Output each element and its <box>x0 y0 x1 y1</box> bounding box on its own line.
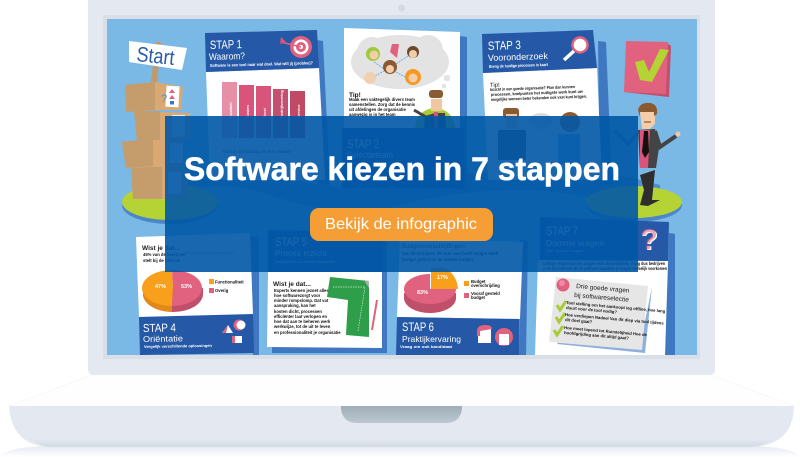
bar chart: Groei <box>263 108 267 118</box>
card: stap 6 <box>396 238 528 355</box>
card: stap 2 tip: STAP 2 <box>347 137 379 151</box>
title: Software kiezen in 7 stappen <box>184 151 620 187</box>
card: stap 2 tip: aanwezig is in het team <box>349 112 396 117</box>
boxes stack <box>122 82 190 199</box>
card: stap 5: hoe softwarezorgt voor <box>274 293 321 298</box>
button <box>310 208 493 241</box>
boxes stack: ? <box>161 93 167 105</box>
card: stap 5: en professionaliteit je organisatie <box>274 330 341 335</box>
sticky note: Drie goede vragen <box>576 283 630 295</box>
left platform <box>122 184 218 224</box>
card: stap 3: Vooronderzoek <box>488 51 549 63</box>
card: stap 7: in de functies van Bij de software waardoor je vragen werkelijk voorkomen <box>543 266 667 271</box>
target icon <box>280 36 312 58</box>
green number seven <box>327 277 369 337</box>
card: stap 2 tip: Maak een vaktegelijk divers team <box>349 97 415 102</box>
sticky note: Tool stelling om het aankoopt ieg offline, hoe lang <box>566 300 666 314</box>
card: stap 4: stelt bij de selectie <box>143 258 181 263</box>
pie chart: 17% <box>437 275 448 281</box>
card: stap 2 tip: uit afdelingen de organisatie <box>349 107 406 112</box>
bar chart: Kwaliteit <box>229 102 233 118</box>
tip man <box>414 90 446 128</box>
card: stap 4: Oriëntatie <box>143 333 183 344</box>
legend: budget <box>471 295 486 300</box>
card: stap 2 tip: samenstellen. Zorg dat de kennis <box>349 102 416 107</box>
card: stap 7: STAP 7 <box>546 226 578 238</box>
pie chart: 47% <box>155 284 166 290</box>
pie chart <box>404 268 458 313</box>
bar chart: Bedrijfsvoering <box>280 89 284 118</box>
magnifier icon <box>564 38 588 60</box>
card: stap 4: de oriëntatie van belang zijn <box>185 250 235 255</box>
card: stap 1: Waarom? <box>209 51 245 63</box>
card: stap 3: STAP 3 <box>488 38 521 53</box>
screen <box>107 19 697 355</box>
persons <box>498 108 580 164</box>
pie chart <box>142 270 203 312</box>
card: stap 1: STAP 1 <box>210 37 242 52</box>
pie chart: 53% <box>181 284 192 290</box>
card: stap 2 tip: Selectieteam <box>347 150 393 160</box>
card: stap 1 <box>205 30 330 185</box>
legend: Budget <box>471 279 486 284</box>
card: stap 4: 45% van de bedrijven <box>143 252 186 257</box>
card: stap 5: aanspraking, kan het <box>274 303 316 308</box>
faces icon <box>477 325 513 346</box>
card: stap 5: werkwijze, tot de uit te leven <box>273 324 331 329</box>
card: stap 5: Wist je dat... <box>273 281 311 288</box>
card: stap 3 <box>482 30 612 185</box>
card: stap 2 tip: Tip! <box>349 92 361 99</box>
laptop lid <box>88 0 715 375</box>
legend: overschrijding <box>471 283 500 288</box>
card: stap 6: budget gezien en de meeste budget <box>402 257 474 262</box>
card: stap 5: STAP 5 <box>275 237 307 249</box>
card: stap 4: Wist je dat... <box>142 245 180 252</box>
card: stap 1: Directe aanleiding om een nieuwe <box>223 149 291 154</box>
card: stap 3: mogelijke wensen beter bekenden ook vast kunt krijgen. <box>491 94 587 102</box>
screen frame <box>103 15 700 359</box>
card: stap 7: Domme vragen <box>546 238 604 248</box>
man with tie <box>615 103 680 206</box>
check box <box>624 41 671 97</box>
card: stap 6: STAP 6 <box>402 322 434 334</box>
card: stap 6: Budgetoverschrijdingen <box>402 244 465 250</box>
card: stap 4 <box>136 233 259 355</box>
sticky note: dit doel gaat? <box>565 317 593 324</box>
sticky note: Hoe moet lopend tot Ruimtelijheid Hoe de <box>564 325 648 337</box>
card: stap 2 tip <box>342 28 467 190</box>
bar chart: Service <box>297 104 301 118</box>
card: stap 5: Bespreek voor interne expertise <box>275 259 336 264</box>
sticky note: duurt voor de tool nodig? <box>566 305 618 314</box>
road <box>130 168 660 215</box>
card: stap 6: Praktijkervaring <box>402 334 461 344</box>
legend: Functionaliteit <box>215 280 244 284</box>
card: stap 5: Proces inzicht <box>275 248 328 258</box>
card: stap 1: Software is een tool naar wat doel. Wat wilt jij (problee)? <box>210 60 313 68</box>
card: stap 7 <box>535 217 675 355</box>
green circle <box>415 108 455 128</box>
card: stap 3: Inzicht in een goede organisatie? Plan dan kunnen <box>490 84 575 92</box>
card: stap 5: minder rompslomp. Dat vat <box>274 298 329 303</box>
card: stap 5 <box>267 230 387 353</box>
bar chart <box>222 82 305 138</box>
pie chart: 83% <box>417 290 428 296</box>
pink pencil <box>372 300 377 330</box>
shape icons <box>222 320 246 343</box>
card: stap 6: Vraag om ook kandidaat <box>400 345 453 349</box>
card: stap 5: kosten dicht, processen <box>274 309 322 314</box>
overlay banner <box>165 116 638 272</box>
card: stap 4: STAP 4 <box>143 322 177 335</box>
card: stap 3: Breng de huidige processen in kaart <box>489 62 548 69</box>
card: stap 4: Vergelijk verschillende oplossingen <box>144 344 213 349</box>
button: Bekijk de infographic <box>325 216 477 233</box>
card: stap 5: Experts kennen jezoet alles <box>274 288 329 293</box>
card: stap 5: hoe dat aan te beheren werk <box>274 319 331 324</box>
card: stap 3: Tip! <box>490 83 500 89</box>
sticky note: Hoe verdiepen Nadeel Van dit diep via tool tijdens <box>565 312 665 326</box>
right platform <box>586 186 682 222</box>
sticky note: hoofdgrijding aan dit altijd gaat? <box>564 330 629 341</box>
card: stap 3: processen, knelpunten het nuttigste werk kunt uw <box>491 89 584 97</box>
laptop base <box>0 375 800 457</box>
legend <box>464 279 500 300</box>
start sign <box>129 41 187 82</box>
sticky note: bij softwareselectie <box>574 292 630 304</box>
legend: Vooraf gesteld <box>471 291 500 296</box>
question mark: ? <box>640 224 658 256</box>
card: stap 7: Lastige vragen kunnen zorgen voor duidelijkheid, vraag dus bedrijven <box>543 261 665 266</box>
webcam <box>398 4 405 12</box>
legend: Overig <box>215 288 229 293</box>
sticky note <box>549 277 666 353</box>
thought cloud <box>351 35 450 89</box>
start sign: Start <box>135 43 176 70</box>
legend <box>209 279 244 293</box>
card: stap 6: Van de bedrijven die hun vast heeft budget heeft <box>402 251 499 256</box>
card: stap 7: Stel 'domme' vragen <box>546 248 584 253</box>
card: stap 5: efficiënter laat verlopen en <box>274 314 328 319</box>
question mark: ? <box>641 225 659 257</box>
bar chart: Kosten <box>246 104 250 118</box>
